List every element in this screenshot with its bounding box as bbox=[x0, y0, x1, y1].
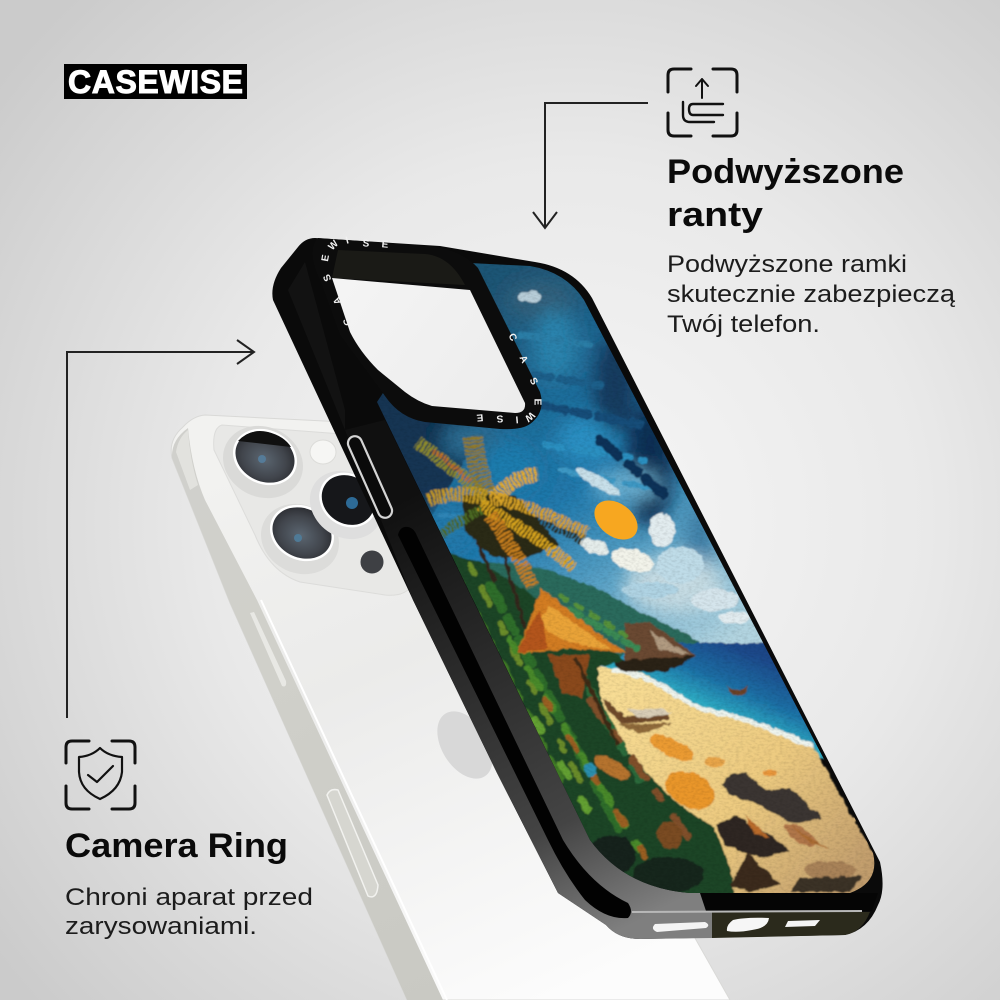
palm trunks bbox=[475, 538, 526, 628]
headland light rock bbox=[650, 630, 690, 655]
apple logo bbox=[426, 701, 504, 789]
camera plateau bbox=[214, 425, 412, 595]
rocks bbox=[716, 772, 862, 892]
heading: Podwyższone ranty: Podwyższone bbox=[667, 153, 904, 191]
beach artwork bbox=[377, 263, 874, 893]
lens bottom bbox=[249, 491, 351, 587]
side face sheen bbox=[288, 262, 345, 430]
arrow: camera ring bbox=[67, 340, 254, 718]
arrow: raised edges bbox=[533, 103, 648, 228]
blue brush strokes bbox=[440, 335, 670, 530]
gray side strip bbox=[345, 420, 712, 939]
thatched highlight bbox=[538, 605, 612, 650]
side button upper bbox=[250, 612, 286, 686]
corner highlight bbox=[176, 430, 198, 490]
thatched shade bbox=[517, 610, 548, 654]
ring lettering: S bbox=[321, 272, 334, 283]
ring lettering: S bbox=[496, 412, 504, 424]
logo: CASEWISE: CASEWISE bbox=[68, 64, 243, 100]
sky bbox=[382, 263, 764, 668]
palm crown shadow bbox=[462, 495, 560, 560]
ring lettering: E bbox=[381, 239, 389, 251]
ring lettering: W bbox=[522, 409, 537, 424]
text: raised edges description: Twój telefon. bbox=[667, 311, 820, 338]
case shell bbox=[272, 238, 883, 939]
umbrella pole bbox=[575, 658, 618, 745]
sand bbox=[596, 665, 874, 893]
ring lettering: I bbox=[344, 235, 350, 247]
bottom port mic bbox=[785, 920, 820, 927]
ring lettering: A bbox=[331, 295, 344, 306]
lounge chairs bbox=[603, 698, 672, 734]
dark navy left sky bbox=[377, 394, 469, 516]
flash bbox=[310, 440, 336, 464]
far hill bbox=[470, 563, 703, 680]
ring outer bbox=[312, 238, 542, 429]
ring lettering: E bbox=[476, 411, 484, 423]
ring lettering: C bbox=[506, 332, 519, 343]
text: raised edges description: Podwyższone ramki bbox=[667, 251, 907, 278]
bottom rim line bbox=[632, 911, 862, 912]
text: camera ring description bbox=[65, 884, 313, 940]
palm fronds bbox=[418, 436, 587, 587]
side button lower bbox=[327, 790, 378, 897]
paint grain bbox=[418, 265, 874, 893]
heading: Podwyższone ranty: ranty bbox=[667, 196, 763, 234]
bottom port speaker bbox=[653, 922, 708, 932]
sun bbox=[594, 500, 638, 540]
sea bbox=[604, 641, 824, 760]
heading: Camera Ring: Camera Ring bbox=[65, 827, 288, 865]
heading: Podwyższone ranty bbox=[667, 153, 904, 234]
lower olive lip bbox=[712, 912, 870, 938]
phone side band bbox=[172, 428, 443, 1000]
text: raised edges description: skutecznie zabezpieczą bbox=[667, 281, 956, 308]
lens right bbox=[297, 457, 395, 553]
ring lettering: E bbox=[320, 254, 332, 262]
black side slot bbox=[398, 527, 631, 918]
ring lettering: S bbox=[527, 376, 540, 387]
icon: raised edges bbox=[668, 69, 737, 136]
headland base bbox=[613, 656, 697, 672]
jungle shadows bbox=[584, 751, 704, 893]
black case bbox=[272, 238, 883, 939]
headland rocks bbox=[623, 621, 696, 662]
jungle vegetation bbox=[440, 550, 735, 900]
thatched umbrella bbox=[517, 588, 626, 654]
white clouds bbox=[518, 291, 751, 624]
white phone bbox=[171, 413, 730, 1000]
phone body bbox=[171, 415, 730, 1000]
hut wall bbox=[548, 655, 590, 698]
ring lettering: A bbox=[517, 354, 530, 365]
ring lettering bbox=[320, 235, 542, 425]
text: camera ring description: Chroni aparat przed bbox=[65, 884, 313, 911]
sand patches bbox=[646, 730, 856, 879]
side highlight bbox=[261, 600, 447, 1000]
text: camera ring description: zarysowaniami. bbox=[65, 913, 257, 940]
sensor bbox=[360, 550, 384, 574]
jungle brush strokes bbox=[450, 565, 690, 880]
ring lettering: W bbox=[326, 238, 341, 253]
lens top bbox=[211, 413, 315, 511]
text: raised edges description bbox=[667, 251, 956, 338]
ring lettering: E bbox=[532, 399, 542, 406]
icon: shield bbox=[66, 741, 135, 809]
ring lettering: I bbox=[515, 413, 519, 425]
soft sky masses bbox=[424, 280, 725, 613]
boat bbox=[726, 685, 748, 695]
black lower rim bbox=[700, 893, 878, 911]
camera opening bbox=[332, 278, 525, 413]
ring inner wall bbox=[332, 250, 465, 285]
ring lettering: S bbox=[362, 238, 370, 250]
foam bbox=[612, 670, 813, 746]
bottom port usb bbox=[727, 918, 769, 932]
ring lettering: C bbox=[341, 316, 354, 327]
silver side button bbox=[346, 434, 394, 520]
camera ring bbox=[312, 235, 542, 429]
